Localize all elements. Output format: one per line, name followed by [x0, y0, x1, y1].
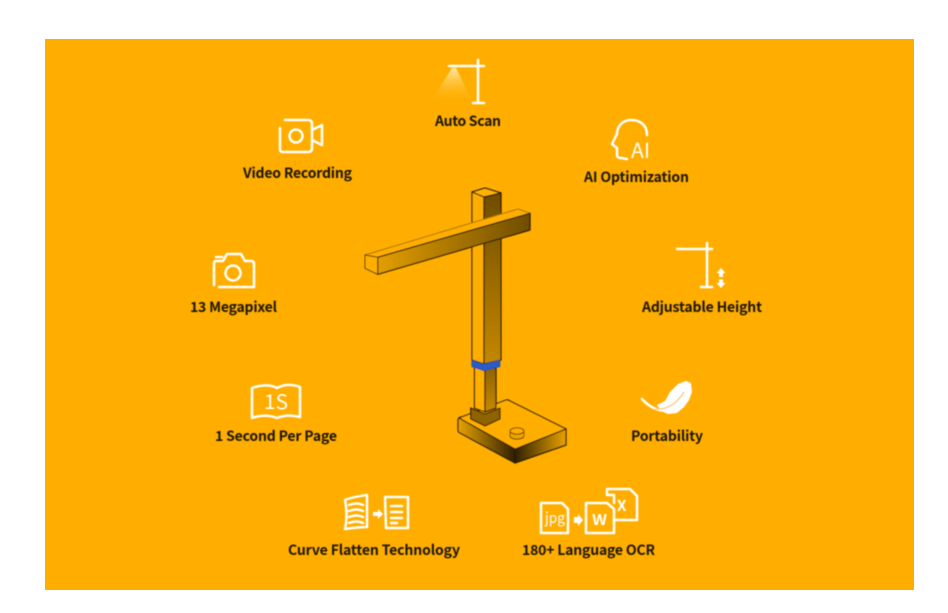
scanner lamp illustration: [365, 188, 566, 463]
label: Adjustable Height: Adjustable Height: [641, 297, 762, 317]
icon: jpg to word and excel documents: [541, 489, 637, 533]
icon: video camera: [280, 120, 322, 152]
label: Auto Scan: Auto Scan: [434, 111, 501, 131]
feature: Curve Flatten Technology: [288, 495, 460, 560]
feature: 1 Second Per Page: [215, 385, 337, 446]
feature: 180+ Language OCR: [522, 489, 655, 560]
label: Portability: Portability: [631, 426, 703, 446]
icon: head with AI: AI: [631, 135, 650, 165]
lamp collar: [471, 408, 500, 426]
label: 180+ Language OCR: 180+ Language OCR: [522, 540, 655, 560]
icon: jpg to word and excel documents: W: [592, 509, 607, 530]
label: AI Optimization: AI Optimization: [583, 167, 689, 187]
icon: jpg to word and excel documents: jpg: [544, 507, 565, 528]
lamp base: [458, 400, 566, 463]
lamp upper post: [472, 188, 501, 364]
label: 1 Second Per Page: 1 Second Per Page: [215, 426, 337, 446]
lamp lower post: [474, 366, 496, 412]
label: Video Recording: Video Recording: [242, 163, 353, 183]
icon: lamp with light beam: [430, 60, 484, 103]
feature: Adjustable Height: [641, 243, 762, 317]
feature: AI Optimization: [583, 120, 689, 187]
icon: curved page to flat page: [345, 495, 408, 529]
feature: 13 Megapixel: [190, 254, 278, 317]
icon: lamp with height arrows: [677, 243, 726, 288]
lamp arm: [365, 209, 530, 274]
label: 13 Megapixel: 13 Megapixel: [190, 297, 278, 317]
feature: Auto Scan: [430, 60, 501, 131]
feature: Video Recording: [242, 120, 353, 183]
label: Curve Flatten Technology: Curve Flatten Technology: [288, 540, 460, 560]
icon: camera: [214, 254, 254, 287]
blue band: [472, 360, 500, 371]
icon: open book with 1S: 1S: [264, 386, 288, 415]
feature: Portability: [631, 381, 703, 446]
icon: jpg to word and excel documents: X: [617, 495, 627, 516]
icon: feather: [642, 381, 692, 414]
